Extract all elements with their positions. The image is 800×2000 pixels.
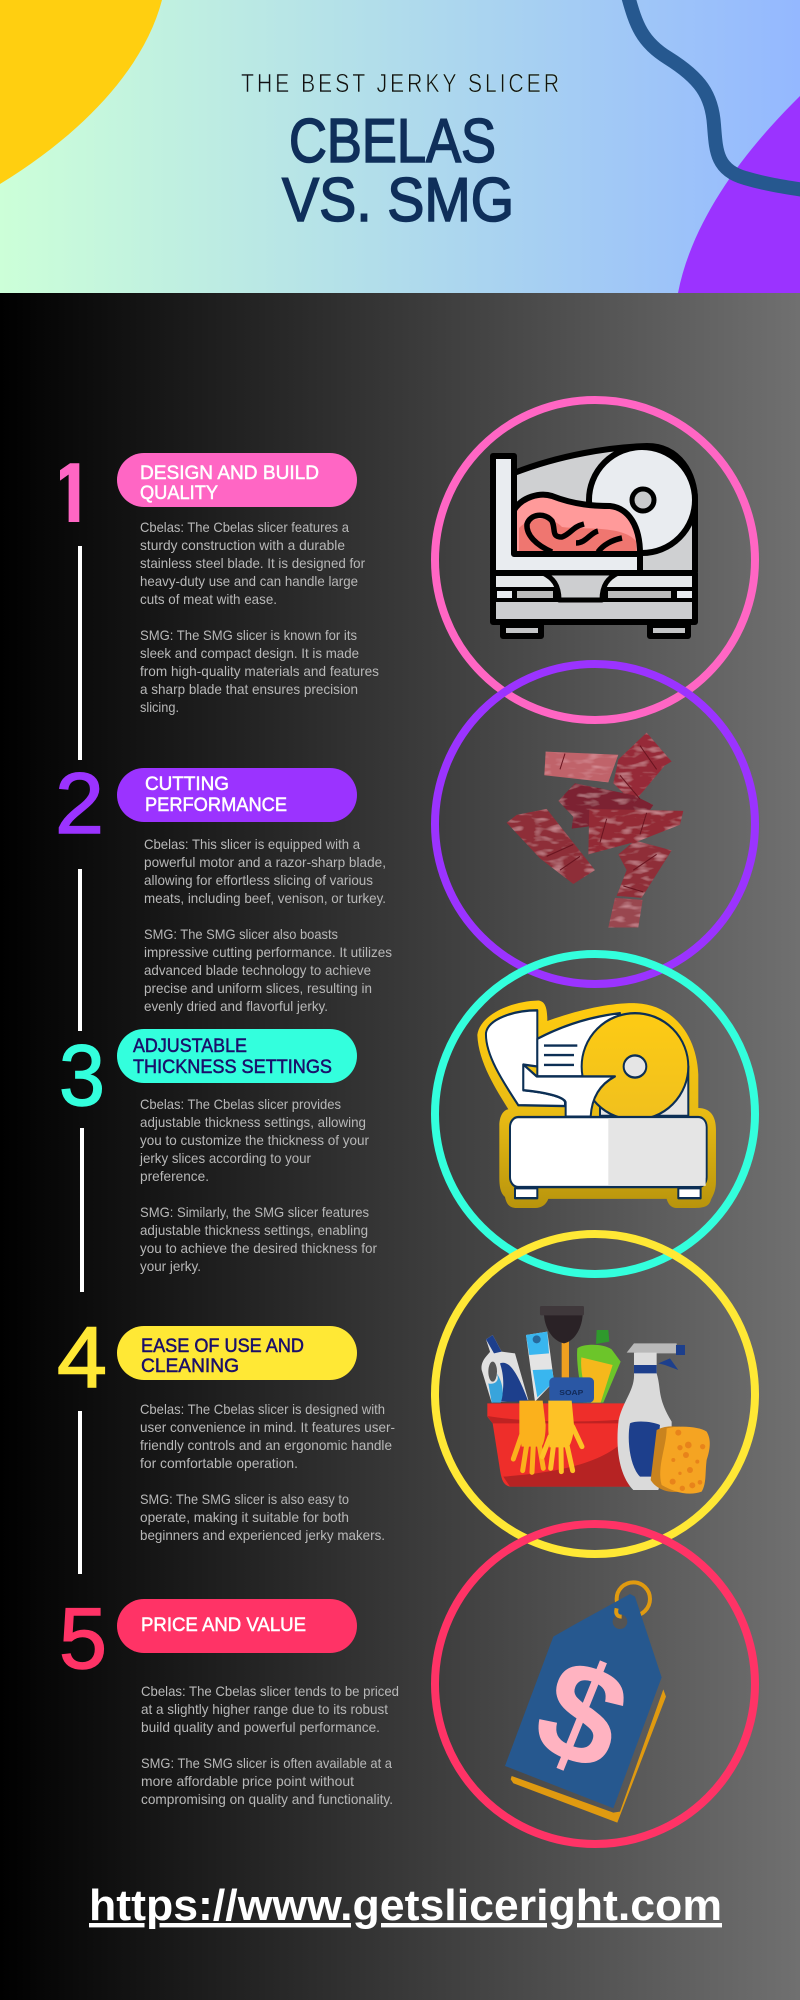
section 1 text: sturdy construction with a durable: [140, 537, 345, 553]
section 5 text: at a slightly higher range due to its robust: [141, 1701, 388, 1717]
section 2 text: evenly dried and flavorful jerky.: [144, 998, 328, 1014]
section 2 text: SMG: The SMG slicer also boasts: [144, 926, 338, 942]
plunger: [540, 1306, 584, 1378]
section 4 heading pill: CLEANING: [141, 1355, 239, 1377]
circle ring 1: [435, 400, 755, 720]
timeline line 3: [80, 1128, 84, 1292]
main title: VS. SMG: [282, 166, 514, 235]
section 4 text: friendly controls and an ergonomic handle: [140, 1437, 392, 1453]
section 4 text: Cbelas: The Cbelas slicer is designed with: [140, 1401, 385, 1417]
purple corner shape: [678, 96, 800, 293]
blue bottle: [481, 1335, 528, 1403]
section 3 heading pill: THICKNESS SETTINGS: [133, 1056, 332, 1078]
section 2 heading pill: CUTTING: [145, 773, 229, 795]
section 3 text: SMG: Similarly, the SMG slicer features: [140, 1204, 369, 1220]
section 3 text: your jerky.: [140, 1258, 201, 1274]
section 2 number: 2: [55, 756, 104, 852]
circle ring 3: [435, 954, 755, 1274]
section 5 text: compromising on quality and functionality.: [141, 1791, 393, 1807]
section 4 heading pill: EASE OF USE AND: [141, 1335, 304, 1357]
section 1 text: Cbelas: The Cbelas slicer features a: [140, 519, 349, 535]
section 1 text: [140, 519, 379, 715]
icon: jerky strips: [507, 733, 683, 927]
section 1 heading pill: QUALITY: [140, 482, 218, 504]
main title: [282, 107, 514, 235]
section 5 heading pill: PRICE AND VALUE: [141, 1614, 306, 1636]
spray can: [526, 1332, 554, 1402]
circle ring 5: [435, 1524, 755, 1844]
green bottle: [577, 1330, 621, 1403]
timeline line 1: [78, 546, 82, 760]
section 2 text: advanced blade technology to achieve: [144, 962, 371, 978]
section 3 text: [139, 1096, 377, 1274]
yellow corner shape: [0, 0, 162, 184]
soap bar: SOAP: [559, 1390, 584, 1397]
section 3 text: preference.: [140, 1168, 209, 1184]
section 1 text: stainless steel blade. It is designed for: [140, 555, 365, 571]
section 3 text: you to customize the thickness of your: [140, 1132, 369, 1148]
section 5 text: [141, 1683, 399, 1807]
section 2 text: Cbelas: This slicer is equipped with a: [144, 836, 360, 852]
section 5 heading pill: [117, 1599, 357, 1653]
red basin: [487, 1403, 662, 1487]
section 4 number: 4: [57, 1310, 107, 1406]
timeline line 2: [78, 869, 82, 1031]
section 5 text: Cbelas: The Cbelas slicer tends to be priced: [141, 1683, 399, 1699]
section 2 text: meats, including beef, venison, or turkey.: [144, 890, 386, 906]
yellow gloves: [513, 1401, 582, 1472]
section 4 text: for comfortable operation.: [140, 1455, 298, 1471]
icon: meat slicer outline: [493, 446, 695, 636]
website url: https://www.getsliceright.com: [89, 1881, 722, 1930]
timeline line 4: [78, 1411, 82, 1574]
section 2 text: impressive cutting performance. It utilizes: [144, 944, 392, 960]
section 3 number: 3: [59, 1028, 105, 1124]
section 5 text: more affordable price point without: [141, 1773, 354, 1789]
wavy blue line: [628, 0, 800, 190]
section 5 text: build quality and powerful performance.: [141, 1719, 380, 1735]
section 4 text: beginners and experienced jerky makers.: [140, 1527, 385, 1543]
section 4 text: SMG: The SMG slicer is also easy to: [140, 1491, 349, 1507]
section 4 text: operate, making it suitable for both: [140, 1509, 349, 1525]
section 4 text: [140, 1401, 395, 1543]
circle ring 4: [435, 1234, 755, 1554]
section 3 heading pill: [117, 1029, 357, 1083]
section 1 text: slicing.: [140, 699, 179, 715]
header panel: [0, 0, 800, 293]
section 2 text: allowing for effortless slicing of various: [144, 872, 373, 888]
section 1 number: 1: [45, 443, 100, 553]
section 1 text: cuts of meat with ease.: [140, 591, 277, 607]
subtitle: THE BEST JERKY SLICER: [241, 69, 559, 99]
section 1 heading pill: [117, 453, 357, 507]
soap bar: [549, 1377, 594, 1403]
dollar sign: $: [515, 1626, 648, 1803]
section 3 text: adjustable thickness settings, allowing: [140, 1114, 366, 1130]
section 1 text: heavy-duty use and can handle large: [140, 573, 358, 589]
section 1 text: sleek and compact design. It is made: [140, 645, 359, 661]
section 1 heading pill: DESIGN AND BUILD: [140, 462, 319, 484]
section 2 text: [144, 836, 392, 1014]
spray bottle: [617, 1343, 685, 1490]
section 3 text: jerky slices according to your: [139, 1150, 311, 1166]
section 2 heading pill: [117, 768, 357, 822]
circle ring 2: [435, 664, 755, 984]
section 1 text: SMG: The SMG slicer is known for its: [140, 627, 357, 643]
section 1 text: a sharp blade that ensures precision: [140, 681, 358, 697]
section 4 heading pill: [117, 1326, 357, 1380]
section 5 number: 5: [59, 1591, 107, 1687]
section 3 text: Cbelas: The Cbelas slicer provides: [140, 1096, 341, 1112]
section 4 text: user convenience in mind. It features user-: [140, 1419, 395, 1435]
section 3 heading pill: ADJUSTABLE: [133, 1035, 247, 1057]
section 5 text: SMG: The SMG slicer is often available at a: [141, 1755, 392, 1771]
section 1 text: from high-quality materials and features: [140, 663, 379, 679]
icon: cleaning supplies basket: [481, 1306, 710, 1494]
section 2 text: powerful motor and a razor-sharp blade,: [144, 854, 386, 870]
icon: price tag: [505, 1582, 666, 1823]
section 2 heading pill: PERFORMANCE: [145, 794, 287, 816]
section 3 text: adjustable thickness settings, enabling: [140, 1222, 368, 1238]
section 3 text: you to achieve the desired thickness for: [140, 1240, 377, 1256]
icon: yellow sticker slicer: [477, 1000, 716, 1208]
main title: CBELAS: [289, 107, 496, 176]
orange sponge: [651, 1426, 710, 1494]
section 2 text: precise and uniform slices, resulting in: [144, 980, 372, 996]
